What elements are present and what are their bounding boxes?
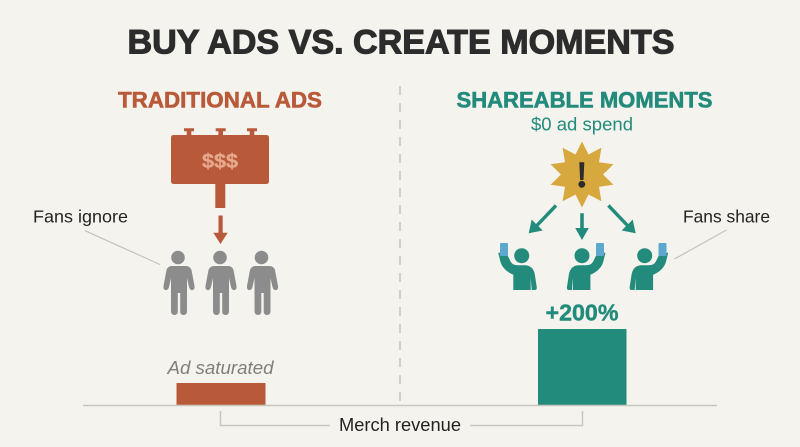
label: fans share: Fans share [683,207,770,227]
subheading: ad spend: $0 ad spend [531,114,633,134]
arrow: down to fans [213,216,228,244]
bracket: merch revenue: Merch revenue [339,415,461,435]
bar: traditional revenue [176,383,266,405]
icon: ignoring fans [163,251,278,315]
bracket: merch revenue [220,411,582,435]
label: ad saturated: Ad saturated [166,358,275,378]
icon: fan sharing center [567,243,606,290]
arrows: spreading to fans [529,204,636,240]
icon: billboard [171,128,269,208]
label: plus 200 percent: +200% [546,300,618,326]
panel: traditional ads [33,88,322,405]
heading: traditional ads: TRADITIONAL ADS [118,88,322,112]
heading: shareable moments: SHAREABLE MOMENTS [456,88,712,112]
baseline [83,404,717,406]
leader line: fans ignore [85,231,160,264]
icon: burst with exclamation [551,142,613,208]
label: fans ignore: Fans ignore [33,207,128,227]
leader line: fans share [674,230,726,259]
icon: fan sharing right [630,243,668,290]
icon: fan sharing left [498,243,537,290]
center divider [399,86,401,405]
icon: billboard: $$$ [202,151,238,173]
bar: moments revenue [538,329,626,405]
title: BUY ADS VS. CREATE MOMENTS [128,24,674,62]
panel: shareable moments [456,88,770,405]
